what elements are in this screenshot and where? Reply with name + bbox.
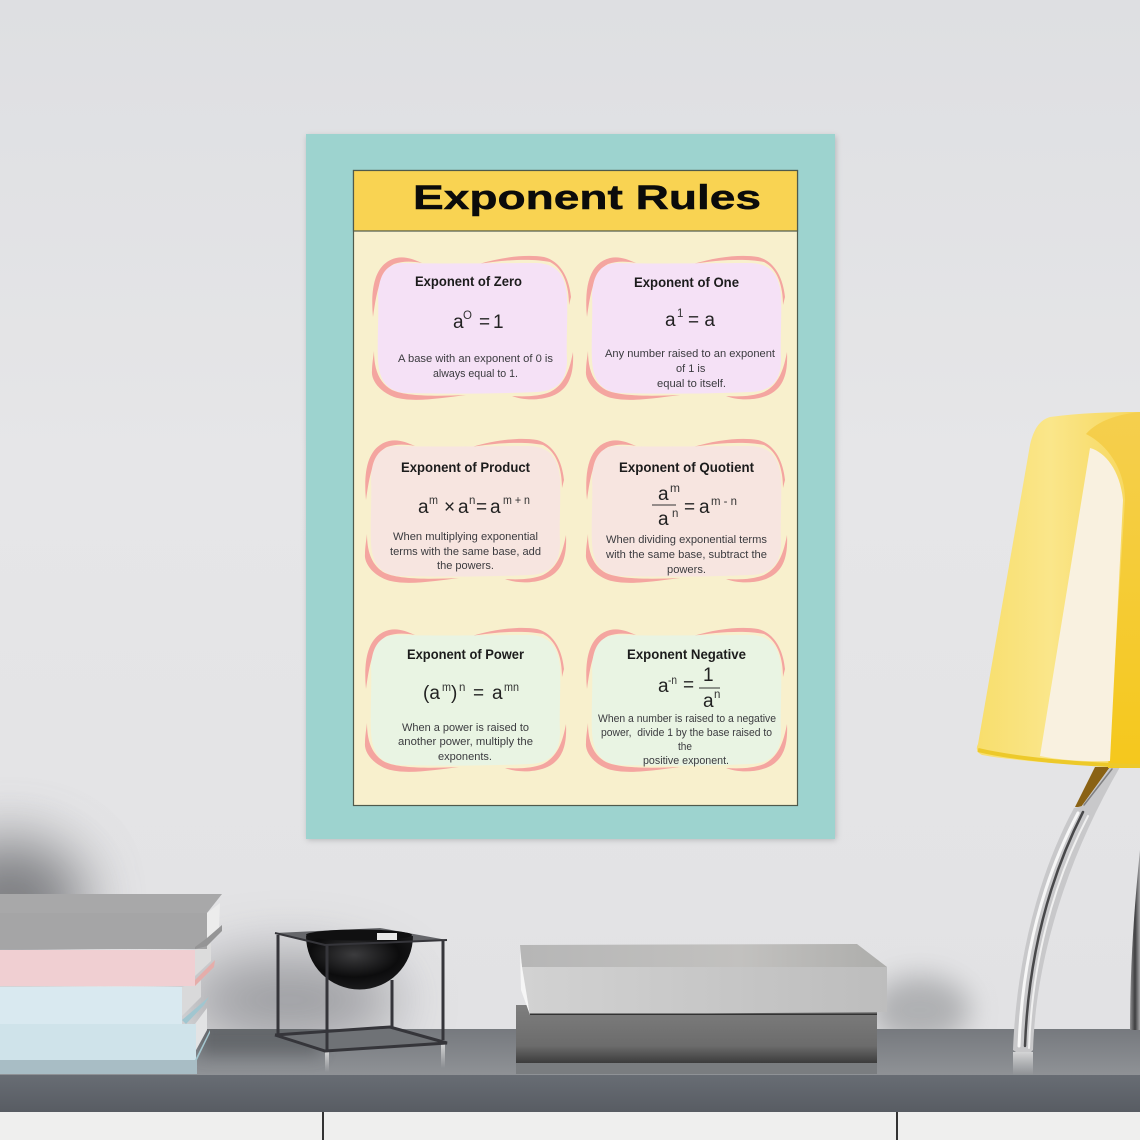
card: exponent of zero: = xyxy=(479,312,490,333)
lamp shade xyxy=(977,412,1140,768)
bowl on square frame xyxy=(275,928,447,1052)
card: exponent negative: the xyxy=(678,741,692,753)
title: Exponent Rules xyxy=(413,179,761,217)
poster xyxy=(306,134,836,840)
shade darker right side xyxy=(1086,412,1140,768)
card: exponent negative: 1 xyxy=(703,665,714,686)
card: exponent of zero: a xyxy=(453,312,464,333)
card: exponent of power: ) xyxy=(451,683,457,704)
card: exponent of product: a xyxy=(490,497,501,518)
card: exponent of one: a xyxy=(665,310,676,331)
card: exponent of one: 1 xyxy=(677,308,683,320)
card: exponent of power: m xyxy=(442,682,451,694)
card: exponent of one: Exponent of One xyxy=(634,275,739,290)
card: exponent of zero: always equal to 1. xyxy=(433,368,518,380)
poster cream panel xyxy=(354,170,798,806)
card: exponent of one: of 1 is xyxy=(676,363,706,375)
card: exponent of quotient: with the same base, subtract the xyxy=(605,549,767,561)
table lamp xyxy=(977,412,1140,1052)
shade rim xyxy=(978,750,1140,766)
card: exponent of product: m xyxy=(429,495,438,507)
card: exponent negative: a xyxy=(658,676,669,697)
header band xyxy=(354,170,798,231)
card: exponent of product: m + n xyxy=(503,495,530,507)
card: exponent of one xyxy=(586,256,787,400)
card: exponent of power: When a power is raised to xyxy=(402,722,529,734)
card: exponent of zero: Exponent of Zero xyxy=(415,274,522,289)
card: exponent negative xyxy=(586,628,787,772)
card: exponent of product: Exponent of Product xyxy=(401,460,530,475)
white cabinet doors xyxy=(0,1112,1140,1140)
card: exponent of zero: 1 xyxy=(493,312,504,333)
card: exponent of one: equal to itself. xyxy=(657,378,726,390)
card: exponent negative: -n xyxy=(668,675,677,687)
card: exponent of quotient: a xyxy=(658,484,669,505)
lamp stem xyxy=(1013,767,1140,1052)
right book stack xyxy=(516,944,887,1074)
card: exponent of quotient: n xyxy=(672,508,678,520)
poster teal border xyxy=(306,134,835,839)
card: exponent of quotient: Exponent of Quotient xyxy=(619,460,754,475)
card: exponent negative: a xyxy=(703,691,714,712)
card: exponent of power: mn xyxy=(504,682,519,694)
card: exponent of quotient: m xyxy=(670,483,680,495)
card: exponent of zero xyxy=(372,256,573,400)
card: exponent negative: = xyxy=(683,675,694,696)
card: exponent of power: n xyxy=(459,682,465,694)
card: exponent of quotient: a xyxy=(658,509,669,530)
card: exponent of power: Exponent of Power xyxy=(407,647,525,662)
card: exponent negative: positive exponent. xyxy=(643,755,729,767)
card: exponent negative: When a number is raised to a negative xyxy=(598,713,776,725)
shelf xyxy=(0,1020,1140,1112)
card: exponent of product: When multiplying exponential xyxy=(393,531,538,543)
card: exponent of zero: A base with an exponent of 0 is xyxy=(398,353,553,365)
card: exponent of product: × xyxy=(444,497,455,518)
card: exponent of power: another power, multiply the xyxy=(398,736,533,748)
wall shadows behind objects xyxy=(0,840,970,1045)
card: exponent of zero: O xyxy=(463,310,472,322)
stem brown reflection xyxy=(1075,767,1110,807)
card: exponent of product: a xyxy=(418,497,429,518)
card: exponent of quotient xyxy=(586,439,787,583)
card: exponent of product: = xyxy=(476,497,487,518)
card: exponent negative: Exponent Negative xyxy=(627,647,746,662)
card: exponent of quotient: = xyxy=(684,497,695,518)
card: exponent of product: n xyxy=(469,495,475,507)
card: exponent of one: = a xyxy=(688,310,715,331)
card: exponent of power: = xyxy=(473,683,484,704)
card: exponent of quotient: When dividing exponential terms xyxy=(606,534,767,546)
left book stack xyxy=(0,894,222,1074)
card: exponent of power: exponents. xyxy=(438,751,492,763)
card: exponent of power xyxy=(365,628,566,772)
card: exponent of power: (a xyxy=(423,683,440,704)
card: exponent negative: power, divide 1 by the base raised to xyxy=(601,727,772,739)
card: exponent negative: n xyxy=(714,689,720,701)
card: exponent of quotient: m - n xyxy=(711,496,737,508)
card: exponent of product: terms with the same base, add xyxy=(390,546,541,558)
card: exponent of quotient: a xyxy=(699,497,710,518)
card: exponent of power: a xyxy=(492,683,503,704)
poster edge shadow xyxy=(307,136,836,840)
card: exponent of product: the powers. xyxy=(437,560,494,572)
card: exponent of product xyxy=(365,439,566,583)
card: exponent of product: a xyxy=(458,497,469,518)
card: exponent of one: Any number raised to an exponent xyxy=(605,348,775,360)
shade highlight xyxy=(1040,448,1123,761)
card: exponent of quotient: powers. xyxy=(667,564,706,576)
